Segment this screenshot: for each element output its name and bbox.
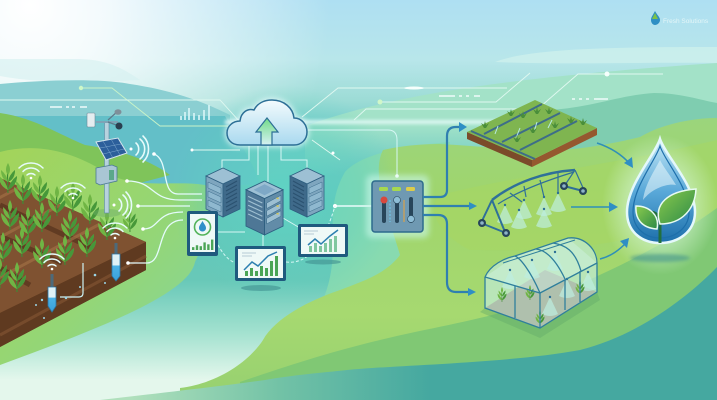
white glow top left <box>0 0 400 130</box>
greenhouse <box>480 238 600 338</box>
wifi signal on sensor right <box>103 223 127 239</box>
wifi signal on sensor left <box>40 254 64 270</box>
mid green wave right <box>434 140 717 250</box>
arrow greenhouse to drop <box>600 238 629 259</box>
decorative data lines upper <box>0 72 663 160</box>
cloud with upload arrow <box>227 100 307 145</box>
server centre <box>246 181 283 235</box>
tablet bottom chart <box>235 246 286 291</box>
arrow pivot to drop <box>571 202 618 212</box>
server right <box>290 168 324 217</box>
drop glow <box>602 135 717 275</box>
wifi signal over field <box>19 163 43 179</box>
arrow to pivot <box>423 202 477 210</box>
wifi signal mid field <box>61 183 85 199</box>
tablet right chart <box>298 224 348 264</box>
pale cloud band left <box>0 59 140 82</box>
arrow to greenhouse <box>423 215 476 296</box>
signal arcs upper <box>130 136 149 162</box>
solar panel <box>96 138 127 160</box>
teal-green wave at land edge <box>322 142 450 302</box>
water drop with leaves <box>627 139 696 243</box>
arrow to drip field <box>423 122 467 197</box>
bright green land right <box>180 118 717 400</box>
centre pivot irrigator <box>478 170 587 237</box>
arrow field to drop <box>597 143 633 168</box>
back hill left <box>0 113 170 220</box>
soil moisture probes <box>35 243 120 319</box>
central glow <box>170 85 400 305</box>
control panel <box>366 175 429 238</box>
upload arrow <box>256 118 278 145</box>
mini bar chart decoration <box>180 105 210 120</box>
server left <box>206 168 240 217</box>
network lines cloud to servers <box>218 130 399 263</box>
soil field block <box>0 163 146 347</box>
water left <box>0 116 260 185</box>
crop plants <box>0 163 137 292</box>
horizontal light band <box>225 120 500 124</box>
darker green band <box>240 208 717 400</box>
logo <box>651 11 709 25</box>
logo: Fresh Solutions <box>663 18 709 25</box>
weather station <box>87 109 127 217</box>
front hill left <box>0 148 214 365</box>
sensor data lines to servers <box>125 152 202 265</box>
teal distant hill right <box>549 93 717 155</box>
drip irrigation field <box>467 100 597 167</box>
signal arcs lower <box>112 192 132 218</box>
pale cloud band right <box>495 47 717 63</box>
sensor box <box>96 165 117 185</box>
drop shadow <box>630 254 690 262</box>
distant hill left <box>0 80 230 125</box>
seedling <box>636 189 696 243</box>
tablet water gauge <box>187 211 218 256</box>
mint field far right <box>305 63 717 175</box>
teal band bottom <box>100 267 717 400</box>
